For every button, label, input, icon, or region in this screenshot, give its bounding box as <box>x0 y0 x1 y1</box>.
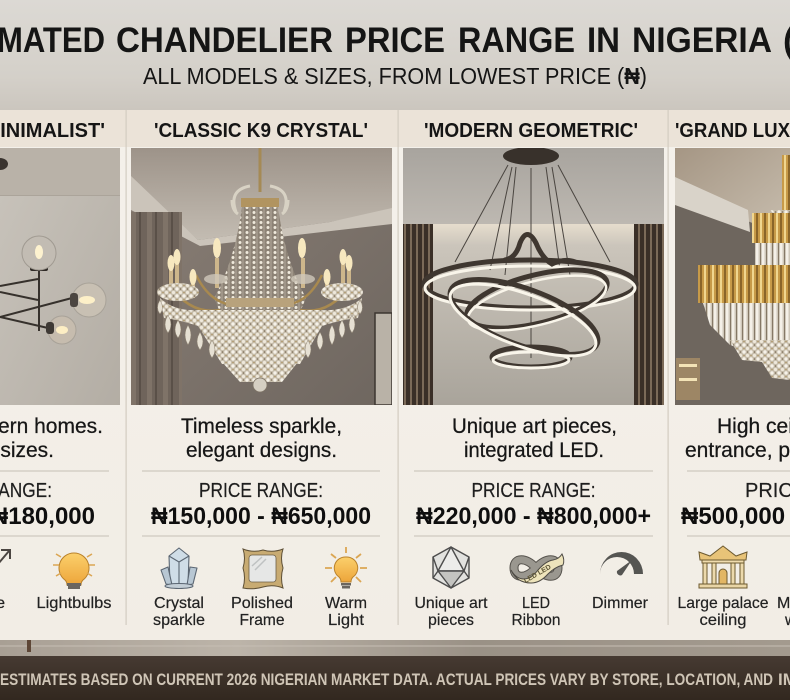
arms <box>182 274 338 310</box>
label: unique art pieces: Unique art <box>414 595 488 612</box>
label: unique art pieces <box>414 595 488 629</box>
main panel <box>0 110 790 640</box>
panel: classic k9 crystal <box>131 120 392 629</box>
heading: classic k9 crystal: 'CLASSIC K9 CRYSTAL' <box>154 120 368 142</box>
label: crystal sparkle <box>153 595 205 629</box>
crystal bowls and basket <box>157 283 199 301</box>
panel: minimalist <box>0 120 120 612</box>
label: polished frame: Frame <box>240 612 285 629</box>
price: modern: PRICE RANGE: <box>472 480 596 502</box>
label: dimmer: Dimmer <box>592 595 649 612</box>
icon: arrow <box>0 550 10 564</box>
image: geometric led chandelier <box>403 147 664 405</box>
icon: palace <box>699 546 747 588</box>
description: classic: elegant designs. <box>186 439 337 462</box>
label: warm light: Light <box>328 612 365 629</box>
divider <box>398 110 399 625</box>
label: led ribbon: LED <box>522 595 550 612</box>
panel: modern geometric <box>403 120 664 629</box>
label: multi wide <box>777 595 790 629</box>
description: grand luxury <box>685 415 790 462</box>
title: PRICE <box>345 21 445 60</box>
icon: led ribbon <box>511 554 564 585</box>
label: large palace ceiling: ceiling <box>700 612 746 629</box>
floor strip <box>0 640 790 657</box>
label: polished frame: Polished <box>231 595 293 612</box>
price: classic: ₦150,000 - ₦650,000 <box>151 503 371 530</box>
chain and crown <box>258 148 262 192</box>
heading: modern geometric: 'MODERN GEOMETRIC' <box>424 120 638 142</box>
description: minimalist <box>0 415 103 462</box>
price: classic: PRICE RANGE: <box>199 480 323 502</box>
label: warm light <box>325 595 367 629</box>
description: modern: Unique art pieces, <box>452 415 617 438</box>
image: grand luxury chandelier <box>675 148 790 405</box>
price: classic <box>151 480 371 530</box>
rules <box>0 471 790 536</box>
description: classic: Timeless sparkle, <box>181 415 342 438</box>
price: grand luxury <box>681 480 790 530</box>
room background <box>0 0 790 110</box>
label: crystal sparkle: sparkle <box>153 612 205 629</box>
icon: polyhedron <box>433 547 469 588</box>
icon: polished frame <box>243 549 283 589</box>
label: large palace ceiling: Large palace <box>678 595 769 612</box>
price: modern: ₦220,000 - ₦800,000+ <box>416 503 651 530</box>
icon: warm light <box>325 547 367 588</box>
description: modern: integrated LED. <box>464 439 604 462</box>
label: crystal sparkle: Crystal <box>154 595 204 612</box>
label: polished frame <box>231 595 293 629</box>
title: CHANDELIER <box>116 21 333 60</box>
panel: grand luxury <box>675 120 790 629</box>
icon: crystal <box>161 548 197 588</box>
candles <box>169 258 351 298</box>
price: minimalist <box>0 480 95 530</box>
divider <box>126 110 127 625</box>
label: led ribbon <box>512 595 560 629</box>
description: classic <box>181 415 342 462</box>
price: modern <box>416 480 651 530</box>
header band <box>0 110 790 147</box>
label: lightbulbs: Lightbulbs <box>36 595 112 612</box>
image: crystal chandelier <box>131 148 392 405</box>
icon: led ribbon: LED LED <box>523 564 552 585</box>
divider <box>668 110 669 625</box>
crystal cone <box>214 207 306 312</box>
label: large palace ceiling <box>678 595 769 629</box>
title: RANGE <box>458 21 575 60</box>
subtitle: ALL MODELS & SIZES, FROM LOWEST PRICE (₦) <box>143 63 647 89</box>
title: IN <box>587 21 620 60</box>
label: led ribbon: Ribbon <box>512 612 560 629</box>
title: NIGERIA <box>632 21 772 60</box>
image: minimalist chandelier <box>0 148 120 405</box>
description: modern <box>452 415 617 462</box>
label: unique art pieces: pieces <box>428 612 474 629</box>
icon: dimmer gauge <box>600 552 643 575</box>
icon: lightbulb <box>53 553 95 589</box>
label: warm light: Warm <box>325 595 367 612</box>
footer bar <box>0 656 790 700</box>
